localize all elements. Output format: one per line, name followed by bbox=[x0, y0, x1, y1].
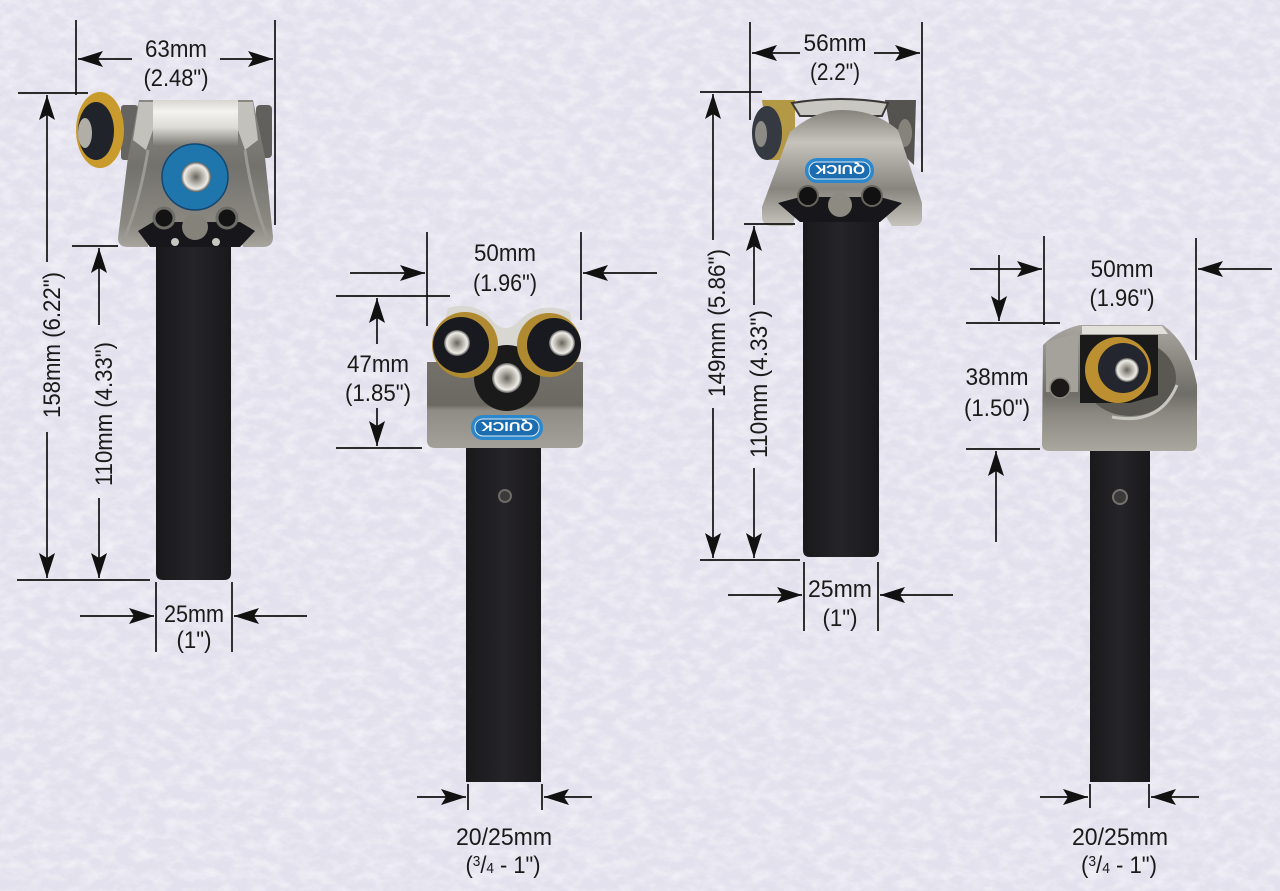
tool 4 shank bbox=[1090, 450, 1150, 782]
dimensions: tool 1 bbox=[17, 20, 307, 654]
width 20/25mm: 3 bbox=[473, 853, 480, 870]
width 25mm: (1") bbox=[822, 605, 858, 632]
width 50mm: 50mm bbox=[474, 240, 536, 267]
tool 1 top roller bbox=[153, 100, 238, 146]
width 25mm bbox=[728, 562, 953, 632]
tool 2 top cap bbox=[436, 306, 580, 362]
tool 3 QUICK logo bbox=[805, 158, 874, 183]
width 63mm: (2.48") bbox=[144, 65, 208, 92]
width 20/25mm: ( bbox=[1081, 852, 1089, 879]
height 149mm: 149mm (5.86") bbox=[704, 249, 731, 397]
width 50mm: (1.96") bbox=[1090, 285, 1154, 312]
tool 2 QUICK logo: QUICK bbox=[480, 419, 533, 434]
tool 3 QUICK logo: QUICK bbox=[814, 162, 865, 177]
width 20/25mm: 20/25mm bbox=[1072, 824, 1168, 851]
tool 4 left block with hole bbox=[1046, 333, 1078, 398]
dimensions: tool 4 bbox=[964, 236, 1272, 879]
width 63mm bbox=[76, 20, 275, 225]
width 25mm bbox=[80, 582, 307, 654]
width 20/25mm: 4 - 1") bbox=[1102, 852, 1161, 879]
tool 3 shank bbox=[803, 215, 879, 557]
tool 1 gold knob bbox=[76, 92, 124, 168]
width 63mm: 63mm bbox=[145, 36, 207, 63]
tool 2: holder with two gold knobs bbox=[427, 306, 583, 782]
width 56mm: 56mm bbox=[804, 30, 866, 57]
width 50mm bbox=[970, 236, 1272, 360]
dimensions: tool 3 bbox=[700, 22, 953, 632]
width 25mm: 25mm bbox=[164, 601, 224, 628]
tool 2 shank bbox=[466, 448, 541, 782]
width 20/25mm: 3 bbox=[1088, 853, 1096, 870]
width 56mm bbox=[750, 22, 922, 172]
tool 1 roller flanks bbox=[124, 102, 268, 240]
tool 1 side pins bbox=[121, 105, 272, 160]
width 20/25mm: / bbox=[480, 852, 487, 879]
height 47mm bbox=[336, 296, 450, 448]
tool 4 knob recess bbox=[1080, 335, 1158, 403]
width 20/25mm: 20/25mm bbox=[456, 824, 552, 851]
tool 3 knobs bbox=[752, 100, 916, 165]
tool 2 head body bbox=[427, 362, 583, 448]
height 110mm: 110mm (4.33") bbox=[91, 342, 118, 486]
tool 1: holder with blue disc bbox=[76, 92, 273, 580]
width 20/25mm bbox=[417, 784, 592, 879]
height 158mm: 158mm (6.22") bbox=[39, 272, 66, 418]
tool 4: holder with single gold knob bbox=[1042, 325, 1197, 782]
width 25mm: 25mm bbox=[808, 576, 872, 603]
width 50mm: 50mm bbox=[1090, 256, 1154, 283]
width 50mm: (1.96") bbox=[473, 270, 537, 297]
tool 1 blue disc and screw bbox=[162, 144, 228, 210]
width 20/25mm: / bbox=[1096, 852, 1102, 879]
height 110mm: 110mm (4.33") bbox=[746, 310, 773, 458]
tool 1 head body bbox=[118, 100, 273, 247]
tool 3: holder with dome head bbox=[752, 99, 922, 557]
tool 3 clamp details bbox=[778, 186, 902, 222]
height 47mm: 47mm bbox=[347, 351, 409, 378]
width 56mm: (2.2") bbox=[810, 59, 860, 86]
dimensions: tool 2 bbox=[336, 232, 657, 879]
width 25mm: (1") bbox=[176, 627, 212, 654]
tool 2 QUICK logo bbox=[471, 415, 543, 440]
height 38mm bbox=[964, 255, 1060, 542]
tool 1 shank bbox=[156, 240, 231, 580]
tool 4 head body bbox=[1042, 325, 1197, 451]
tool 3 top ring bbox=[792, 99, 888, 116]
width 20/25mm: 4 - 1") bbox=[486, 852, 545, 879]
tool 1 clamp details bbox=[138, 208, 255, 247]
width 20/25mm bbox=[1040, 784, 1199, 879]
tool 4 dish bbox=[1084, 340, 1177, 419]
width 50mm bbox=[350, 232, 657, 326]
height 38mm: (1.50") bbox=[964, 395, 1030, 422]
height 38mm: 38mm bbox=[966, 364, 1028, 391]
height 47mm: (1.85") bbox=[345, 380, 411, 407]
width 20/25mm: ( bbox=[466, 852, 474, 879]
tool 3 head body bbox=[762, 110, 922, 226]
tool 2 knobs bbox=[432, 312, 581, 411]
tool 4 top edge bbox=[1082, 326, 1168, 334]
